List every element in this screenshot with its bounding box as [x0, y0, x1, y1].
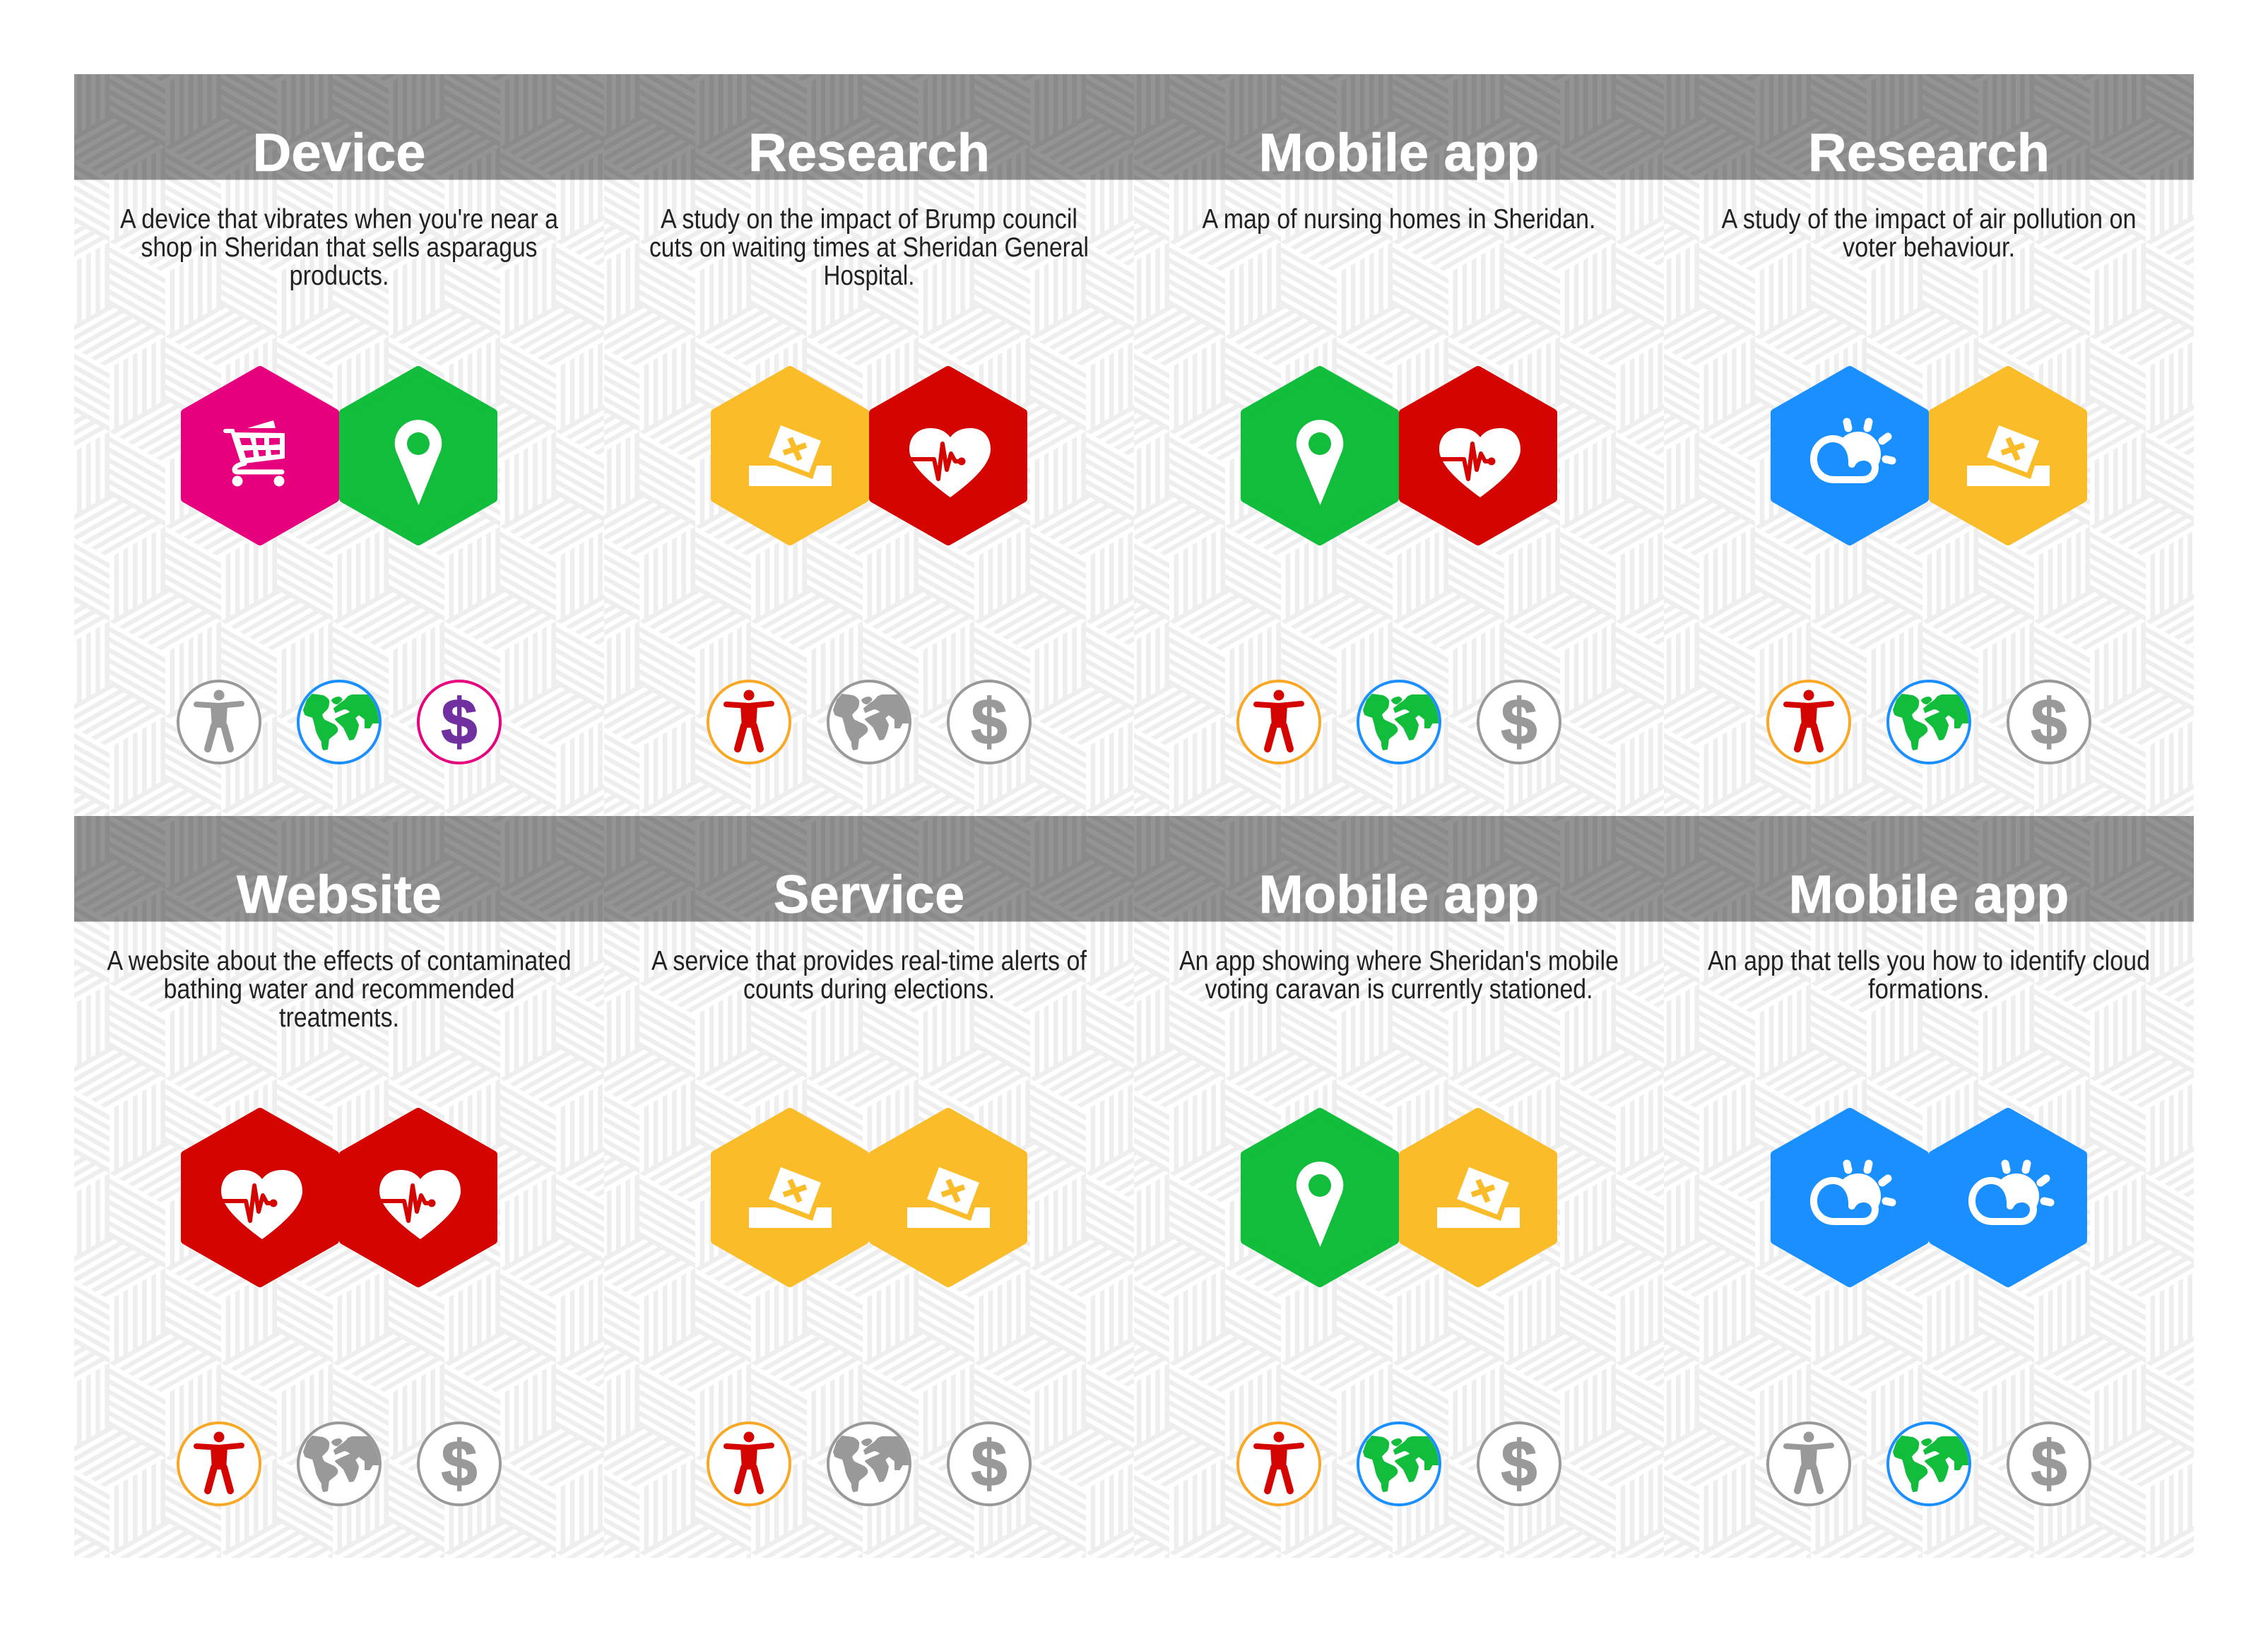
description: A device that vibrates when you're near a: [120, 204, 558, 235]
rating icons: [708, 681, 1030, 763]
rating icons: [178, 1423, 500, 1505]
description: Hospital.: [824, 261, 914, 291]
icon: person active: [178, 1423, 260, 1505]
icon: person active: [1238, 681, 1320, 763]
description: [107, 946, 571, 1033]
description: voting caravan is currently stationed.: [1205, 974, 1593, 1005]
icon: ballot hexagon: [873, 1112, 1023, 1283]
description: [120, 204, 558, 291]
hexagon pair: health and health: [185, 1112, 493, 1283]
icon: heart hexagon: [873, 370, 1023, 541]
icon: globe active: [1888, 1423, 1971, 1505]
icon: dollar active: $: [441, 686, 478, 758]
icon: globe active: [298, 681, 382, 763]
icon: globe inactive: [828, 1423, 911, 1505]
panel: service election alerts: [604, 816, 1134, 1558]
heading: Device: Device: [252, 123, 426, 183]
panel: mobile app voting caravan: [1134, 816, 1664, 1558]
icon: person active: [708, 681, 790, 763]
panel: mobile app cloud formations: [1664, 816, 2194, 1558]
description: [1708, 946, 2150, 1005]
icon: dollar inactive: $: [1501, 686, 1537, 758]
icon: location pin hexagon: [343, 370, 493, 541]
hexagon pair: weather and weather: [1775, 1112, 2083, 1283]
hexagon pair: voting and health: [715, 370, 1023, 541]
icon: shopping cart hexagon: [185, 370, 335, 541]
description: shop in Sheridan that sells asparagus: [141, 232, 537, 263]
icon: dollar inactive: [2008, 681, 2090, 763]
icon: globe active: [1888, 681, 1971, 763]
icon: globe inactive: [828, 681, 911, 763]
heading: Mobile app: Mobile app: [1259, 123, 1539, 183]
hexagon pair: shopping and location: [185, 370, 493, 541]
hexagon pair: location and health: [1245, 370, 1553, 541]
icon: dollar inactive: $: [441, 1428, 478, 1500]
panel: mobile app nursing homes: [1134, 74, 1664, 816]
icon: dollar inactive: $: [1501, 1428, 1537, 1500]
rating icons: [708, 1423, 1030, 1505]
icon: cloud hexagon: [1775, 370, 1925, 541]
icon: dollar inactive: [418, 1423, 500, 1505]
icon: person active: [708, 1423, 790, 1505]
heading: Mobile app: Mobile app: [1789, 865, 2069, 925]
rating icons: [1238, 681, 1560, 763]
icon: ballot hexagon: [715, 1112, 865, 1283]
icon: dollar inactive: [1478, 1423, 1560, 1505]
icon: person active: [1768, 681, 1850, 763]
icon: dollar active: [418, 681, 500, 763]
icon: ballot hexagon: [715, 370, 865, 541]
icon: location pin hexagon: [1245, 1112, 1395, 1283]
icon: globe active: [1358, 681, 1441, 763]
icon: person inactive: [1768, 1423, 1850, 1505]
icon: dollar inactive: [2008, 1423, 2090, 1505]
icon: dollar inactive: $: [971, 1428, 1008, 1500]
icon: dollar inactive: $: [2031, 686, 2067, 758]
heading: Mobile app: Mobile app: [1259, 865, 1539, 925]
description: formations.: [1868, 974, 1990, 1005]
description: A map of nursing homes in Sheridan.: [1203, 204, 1595, 235]
description: products.: [290, 261, 389, 291]
description: [1721, 204, 2137, 263]
panel: device: [74, 74, 604, 816]
rating icons: [1768, 681, 2090, 763]
icon: globe inactive: [298, 1423, 382, 1505]
icon: ballot hexagon: [1403, 1112, 1553, 1283]
icon: person active: [1238, 1423, 1320, 1505]
heading: Research: Research: [1808, 123, 2050, 183]
description: voter behaviour.: [1843, 232, 2015, 263]
icon: dollar inactive: [948, 1423, 1030, 1505]
description: A website about the effects of contaminated: [107, 946, 571, 976]
hexagon pair: location and voting: [1245, 1112, 1553, 1283]
rating icons: [1768, 1423, 2090, 1505]
icon: ballot hexagon: [1933, 370, 2083, 541]
description: bathing water and recommended: [164, 974, 514, 1005]
heading: Website: Website: [237, 865, 442, 925]
panel: website bathing water: [74, 816, 604, 1558]
hexagon pair: voting and voting: [715, 1112, 1023, 1283]
icon: dollar inactive: $: [2031, 1428, 2067, 1500]
heading: Research: Research: [748, 123, 990, 183]
description: A study on the impact of Brump council: [661, 204, 1077, 235]
hexagon pair: weather and voting: [1775, 370, 2083, 541]
panel: research air pollution: [1664, 74, 2194, 816]
description: A service that provides real-time alerts of: [651, 946, 1087, 976]
icon: cloud hexagon: [1933, 1112, 2083, 1283]
icon: heart hexagon: [1403, 370, 1553, 541]
description: An app showing where Sheridan's mobile: [1179, 946, 1619, 976]
heading: Service: Service: [774, 865, 964, 925]
description: [651, 946, 1087, 1005]
description: counts during elections.: [743, 974, 995, 1005]
icon: dollar inactive: [948, 681, 1030, 763]
icon: dollar inactive: [1478, 681, 1560, 763]
panel: research brump: [604, 74, 1134, 816]
description: treatments.: [279, 1003, 399, 1033]
description: [649, 204, 1089, 291]
description: [1179, 946, 1619, 1005]
icon: person inactive: [178, 681, 260, 763]
rating icons: [1238, 1423, 1560, 1505]
icon: location pin hexagon: [1245, 370, 1395, 541]
icon: cloud hexagon: [1775, 1112, 1925, 1283]
icon: heart hexagon: [185, 1112, 335, 1283]
description: An app that tells you how to identify cloud: [1708, 946, 2150, 976]
icon: globe active: [1358, 1423, 1441, 1505]
icon: dollar inactive: $: [971, 686, 1008, 758]
description: cuts on waiting times at Sheridan General: [649, 232, 1089, 263]
rating icons: [178, 681, 500, 763]
icon: heart hexagon: [343, 1112, 493, 1283]
description: A study of the impact of air pollution on: [1721, 204, 2137, 235]
